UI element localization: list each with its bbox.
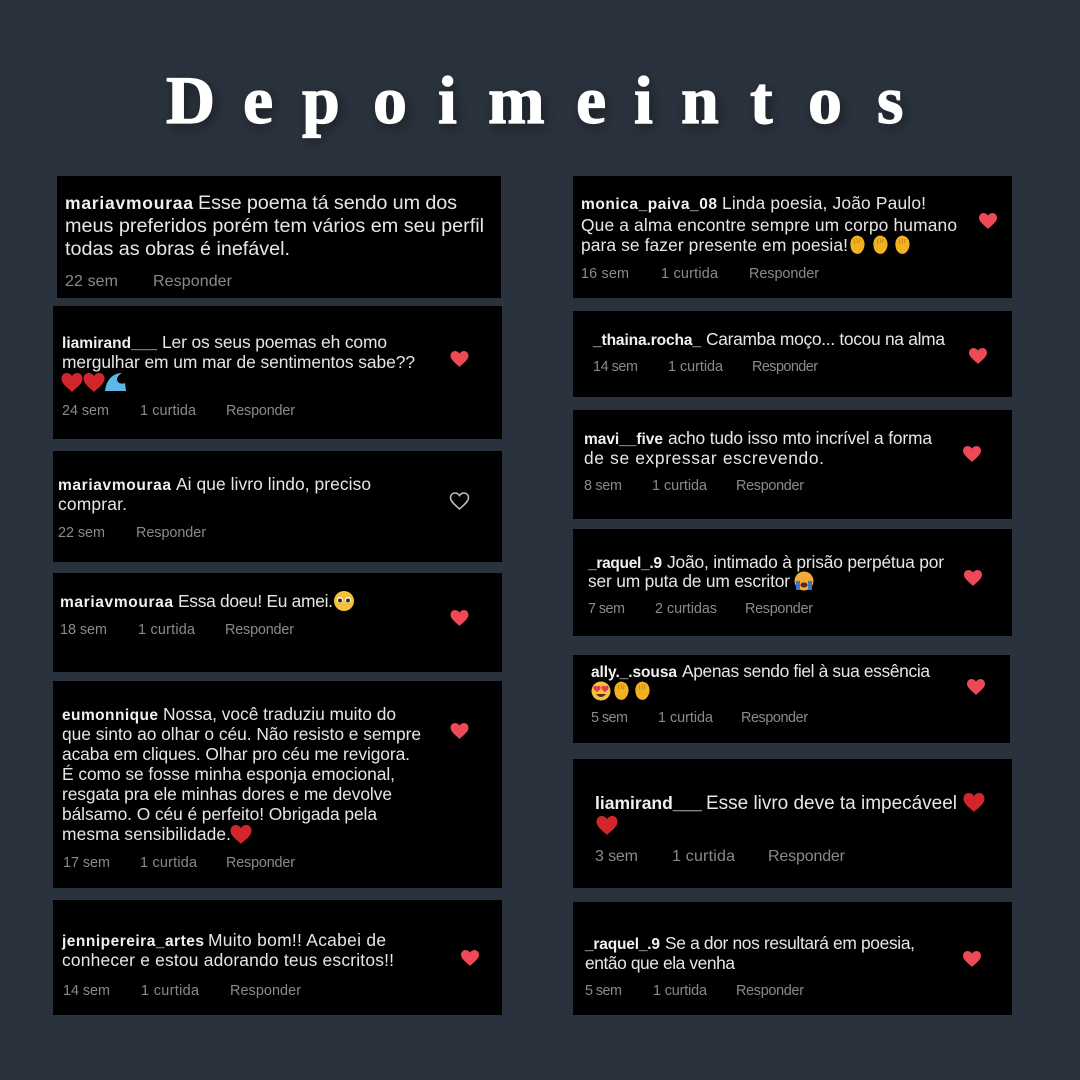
panel: comment liamirand 1: mergulhar em um mar de sentimentos sabe?? <box>62 352 415 372</box>
panel: comment monica_paiva_08 <box>573 176 1012 298</box>
icon: pleading face emoji <box>334 591 354 611</box>
panel: comment mariavmouraa 2: Ai que livro lindo, preciso <box>176 474 371 494</box>
panel: comment ally._.sousa: 5 sem <box>591 710 628 726</box>
panel: comment mariavmouraa 3: Responder <box>225 622 294 638</box>
panel: comment jennipereira_artes: Responder <box>230 983 301 999</box>
panel: comment liamirand 2 <box>573 759 1012 888</box>
panel: comment eumonnique: 17 sem <box>63 855 110 871</box>
panel: comment _raquel_.9 1 <box>573 529 1012 636</box>
icon: liked heart <box>979 213 997 229</box>
panel: comment _thaina.rocha_: 1 curtida <box>668 359 723 375</box>
icon: liked heart <box>964 570 982 586</box>
panel: comment eumonnique: mesma sensibilidade. <box>62 824 231 844</box>
panel: comment eumonnique <box>53 681 502 888</box>
panel: comment mariavmouraa 1: meus preferidos porém tem vários em seu perfil <box>65 215 484 237</box>
panel: comment mavi__five: de se expressar escrevendo. <box>584 448 824 468</box>
panel: comment jennipereira_artes: Muito bom!! Acabei de <box>208 930 386 950</box>
panel: comment _raquel_.9 2: 1 curtida <box>653 983 707 999</box>
panel: comment mariavmouraa 1: todas as obras é inefável. <box>65 238 290 260</box>
icon: liked heart <box>963 951 981 967</box>
panel: comment mavi__five: acho tudo isso mto incrível a forma <box>668 428 932 448</box>
panel: comment _raquel_.9 2: 5 sem <box>585 983 622 999</box>
panel: comment mavi__five: Responder <box>736 478 804 494</box>
panel: comment eumonnique: 1 curtida <box>140 855 197 871</box>
panel: comment mariavmouraa 2: comprar. <box>58 494 127 514</box>
panel: comment _raquel_.9 1: 7 sem <box>588 601 625 617</box>
panel: comment _raquel_.9 2: então que ela venha <box>585 953 735 973</box>
panel: comment mariavmouraa 2: Responder <box>136 525 206 541</box>
panel: comment eumonnique: Nossa, você traduziu muito do <box>163 704 396 724</box>
panel: comment ally._.sousa <box>573 655 1010 743</box>
panel: comment ally._.sousa: ally._.sousa <box>591 664 677 681</box>
panel: comment mariavmouraa 2: mariavmouraa <box>58 477 171 494</box>
panel: comment eumonnique: acaba em cliques. Olhar pro céu me revigora. <box>62 744 410 764</box>
panel: comment mavi__five: mavi__five <box>584 431 663 448</box>
panel: comment monica_paiva_08: monica_paiva_08 <box>581 196 717 213</box>
panel: comment _raquel_.9 1: _raquel_.9 <box>587 555 662 572</box>
panel: comment _thaina.rocha_: _thaina.rocha_ <box>592 332 701 349</box>
icon: liked heart <box>963 446 981 462</box>
panel: comment _raquel_.9 2 <box>573 902 1012 1015</box>
panel: comment liamirand 1: liamirand___ <box>62 335 157 352</box>
panel: comment liamirand 2: 1 curtida <box>672 848 735 865</box>
panel: comment liamirand 1: Responder <box>226 403 295 419</box>
panel: comment _raquel_.9 1: ser um puta de um escritor <box>588 571 790 591</box>
panel: comment jennipereira_artes <box>53 900 502 1015</box>
panel: comment liamirand 1 <box>53 306 502 439</box>
panel: comment monica_paiva_08: Linda poesia, João Paulo! <box>722 193 926 213</box>
panel: comment jennipereira_artes: 14 sem <box>63 983 110 999</box>
panel: comment monica_paiva_08: 1 curtida <box>661 266 718 282</box>
icon: wave emoji <box>105 373 126 391</box>
panel: comment eumonnique: Responder <box>226 855 295 871</box>
panel: comment liamirand 1: 24 sem <box>62 403 109 419</box>
panel: comment eumonnique: bálsamo. O céu é perfeito! Obrigada pela <box>62 804 377 824</box>
panel: comment _raquel_.9 2: Se a dor nos resultará em poesia, <box>665 933 915 953</box>
panel: comment liamirand 2: 3 sem <box>595 848 638 865</box>
panel: comment mariavmouraa 2 <box>53 451 502 562</box>
panel: comment mariavmouraa 1 <box>57 176 501 298</box>
icon: liked heart <box>450 610 468 626</box>
panel: comment monica_paiva_08: 16 sem <box>581 266 629 282</box>
panel: comment mariavmouraa 1: Esse poema tá sendo um dos <box>198 192 457 214</box>
panel: comment eumonnique: resgata pra ele minhas dores e me devolve <box>62 784 392 804</box>
panel: comment mavi__five <box>573 410 1012 519</box>
panel: comment eumonnique: eumonnique <box>62 707 158 724</box>
panel: comment eumonnique: que sinto ao olhar o céu. Não resisto e sempre <box>62 724 421 744</box>
panel: comment monica_paiva_08: para se fazer presente em poesia! <box>581 235 848 255</box>
icon: crying face emoji <box>794 572 814 590</box>
panel: comment mariavmouraa 1: 22 sem <box>65 273 118 290</box>
icon: liked heart <box>969 348 987 364</box>
panel: comment liamirand 2: Esse livro deve ta impecáveel <box>706 793 957 814</box>
panel: comment ally._.sousa: Responder <box>741 710 808 726</box>
panel: comment liamirand 1: Ler os seus poemas eh como <box>162 332 387 352</box>
panel: comment mariavmouraa 3: mariavmouraa <box>60 594 173 611</box>
panel: comment monica_paiva_08: Responder <box>749 266 819 282</box>
panel: comment mavi__five: 1 curtida <box>652 478 707 494</box>
panel: comment _raquel_.9 1: Responder <box>745 601 813 617</box>
icon: outline heart <box>450 493 468 509</box>
panel: comment eumonnique: É como se fosse minha esponja emocional, <box>62 764 395 784</box>
panel: comment mariavmouraa 3 <box>53 573 502 672</box>
panel: comment mavi__five: 8 sem <box>584 478 622 494</box>
panel: comment _raquel_.9 2: Responder <box>736 983 804 999</box>
panel: comment mariavmouraa 2: 22 sem <box>58 525 105 541</box>
panel: comment _raquel_.9 1: 2 curtidas <box>655 601 717 617</box>
panel: comment jennipereira_artes: 1 curtida <box>141 983 199 999</box>
title: Depoimeintos <box>166 62 903 138</box>
panel: comment _raquel_.9 1: João, intimado à prisão perpétua por <box>667 552 944 572</box>
icon: liked heart <box>450 723 468 739</box>
panel: comment monica_paiva_08: Que a alma encontre sempre um corpo humano <box>581 215 957 235</box>
panel: comment _thaina.rocha_: 14 sem <box>593 359 638 375</box>
panel: comment ally._.sousa: Apenas sendo fiel à sua essência <box>682 661 930 681</box>
panel: comment liamirand 1: 1 curtida <box>140 403 196 419</box>
panel: comment _thaina.rocha_ <box>573 311 1012 397</box>
panel: comment _thaina.rocha_: Caramba moço... tocou na alma <box>706 329 945 349</box>
panel: comment _raquel_.9 2: _raquel_.9 <box>584 936 660 953</box>
panel: comment jennipereira_artes: jennipereira_artes <box>61 933 204 950</box>
icon: liked heart <box>967 679 985 695</box>
panel: comment liamirand 2: Responder <box>768 848 846 865</box>
panel: comment jennipereira_artes: conhecer e estou adorando teus escritos!! <box>62 950 394 970</box>
panel: comment mariavmouraa 3: Essa doeu! Eu amei. <box>178 591 333 611</box>
panel: comment mariavmouraa 3: 1 curtida <box>138 622 195 638</box>
panel: comment ally._.sousa: 1 curtida <box>658 710 713 726</box>
icon: liked heart <box>461 950 479 966</box>
panel: comment mariavmouraa 1: mariavmouraa <box>65 193 193 213</box>
panel: comment liamirand 2: liamirand___ <box>595 793 702 813</box>
icon: heart eyes emoji <box>592 682 610 700</box>
icon: liked heart <box>450 351 468 367</box>
panel: comment mariavmouraa 1: Responder <box>153 273 233 290</box>
panel: comment mariavmouraa 3: 18 sem <box>60 622 107 638</box>
panel: comment _thaina.rocha_: Responder <box>752 359 818 375</box>
